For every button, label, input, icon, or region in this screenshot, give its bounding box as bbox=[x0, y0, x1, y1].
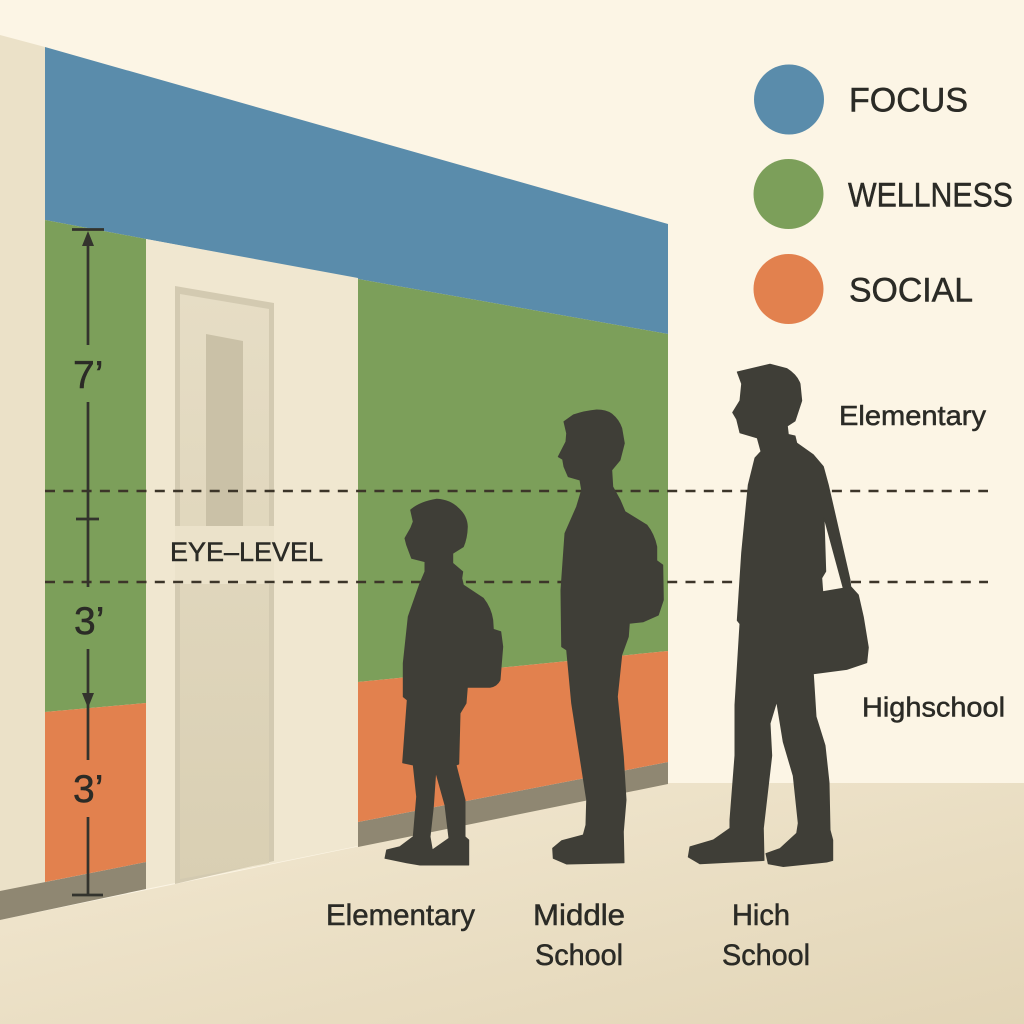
label: upper right elementary: Elementary bbox=[839, 400, 986, 431]
label: high school: School bbox=[722, 939, 810, 972]
label: middle school bbox=[533, 899, 625, 972]
dimension labels: 3’ bbox=[73, 768, 103, 811]
wall band: social right bbox=[358, 651, 668, 822]
wall band: wellness right bbox=[358, 279, 668, 682]
label: middle school: Middle bbox=[533, 899, 625, 932]
eye-level lines bbox=[45, 491, 988, 582]
baseboard right bbox=[358, 762, 668, 847]
label: high school bbox=[722, 899, 810, 972]
legend: focus: FOCUS bbox=[849, 82, 968, 120]
silhouette: elementary bbox=[385, 499, 503, 865]
label: middle school: School bbox=[535, 939, 623, 972]
dimension labels: 7’ bbox=[73, 354, 103, 397]
height dimension scale bbox=[72, 230, 104, 895]
label: elementary: Elementary bbox=[326, 899, 475, 932]
eye-level label: EYE–LEVEL bbox=[170, 537, 323, 567]
dimension labels bbox=[73, 354, 104, 811]
dimension labels: 3’ bbox=[74, 600, 104, 643]
silhouette: middle school bbox=[553, 410, 663, 864]
wall band: wellness left bbox=[45, 220, 146, 712]
floor bbox=[0, 783, 1024, 1024]
legend: wellness bbox=[754, 159, 1013, 229]
silhouette: high school bbox=[688, 364, 868, 866]
baseboard left bbox=[0, 862, 146, 920]
door bbox=[146, 239, 358, 889]
legend: social: SOCIAL bbox=[849, 272, 973, 310]
wall band: focus bbox=[45, 47, 668, 334]
label: upper right highschool: Highschool bbox=[862, 692, 1005, 722]
wall band: social left bbox=[45, 703, 146, 882]
legend: social bbox=[754, 254, 973, 324]
left wall edge bbox=[0, 35, 45, 892]
legend: focus bbox=[754, 64, 968, 134]
label: high school: Hich bbox=[732, 899, 790, 932]
